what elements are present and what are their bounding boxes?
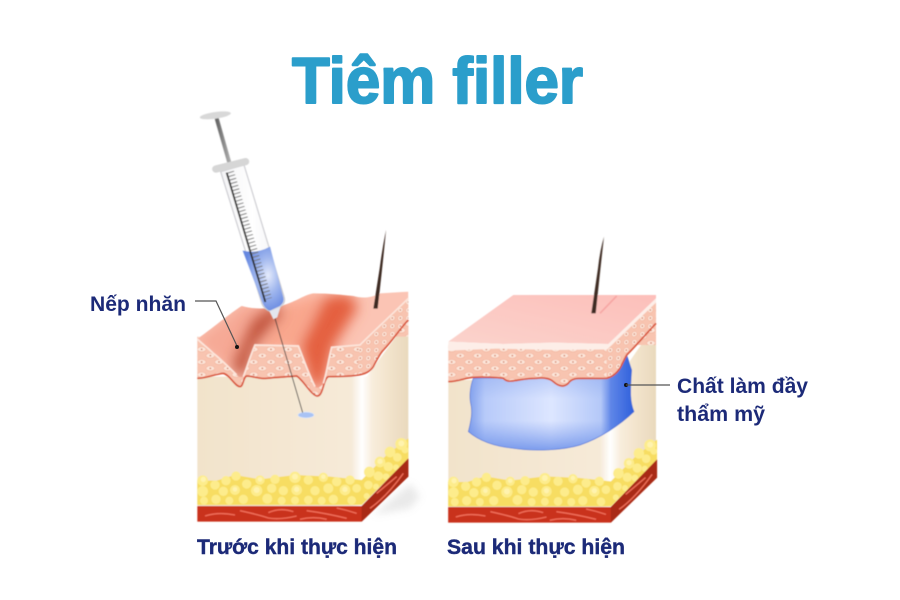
caption: before: Trước khi thực hiện — [197, 536, 397, 559]
skin surface front highlight — [448, 298, 656, 351]
plunger rod — [217, 118, 229, 163]
hair — [373, 230, 386, 309]
fat layer — [448, 439, 657, 506]
muscle layer — [197, 458, 408, 522]
needle — [275, 318, 303, 413]
skin surface front highlight — [197, 298, 408, 387]
epidermis front with cells — [197, 320, 408, 396]
epidermis side with cells — [607, 300, 656, 378]
dermis layer — [197, 320, 408, 506]
fat layer — [197, 438, 408, 505]
cosmetic filler — [468, 355, 634, 450]
muscle layer — [448, 459, 657, 523]
barrel — [221, 165, 285, 311]
panel: after treatment skin block — [448, 237, 657, 523]
title: Tiêm filler — [292, 44, 583, 117]
smooth skin surface — [448, 295, 656, 344]
scale markings — [227, 172, 269, 302]
callout: wrinkle label: Nếp nhăn — [90, 293, 186, 316]
epidermis side with cells — [357, 298, 408, 375]
plunger disc — [199, 110, 231, 121]
callout: filler label: Chất làm đầy — [677, 375, 808, 398]
hair follicle mark — [600, 296, 617, 313]
epidermis lower edge — [448, 323, 656, 386]
epidermis lower edge — [197, 320, 408, 396]
caption: after: Sau khi thực hiện — [447, 536, 625, 559]
panel: before treatment skin block — [193, 230, 420, 522]
flange — [211, 157, 250, 173]
wrinkled skin surface — [198, 291, 409, 388]
callout: filler label: thẩm mỹ — [677, 403, 765, 426]
needle hub — [269, 307, 281, 319]
epidermis front with cells — [448, 323, 656, 386]
callout: filler label — [624, 375, 808, 426]
hair — [591, 237, 604, 313]
callout: wrinkle label — [90, 293, 239, 349]
liquid — [243, 247, 284, 311]
filler droplet — [298, 412, 314, 418]
syringe — [199, 110, 285, 319]
block shadow — [373, 483, 420, 515]
dermis layer — [448, 323, 656, 507]
